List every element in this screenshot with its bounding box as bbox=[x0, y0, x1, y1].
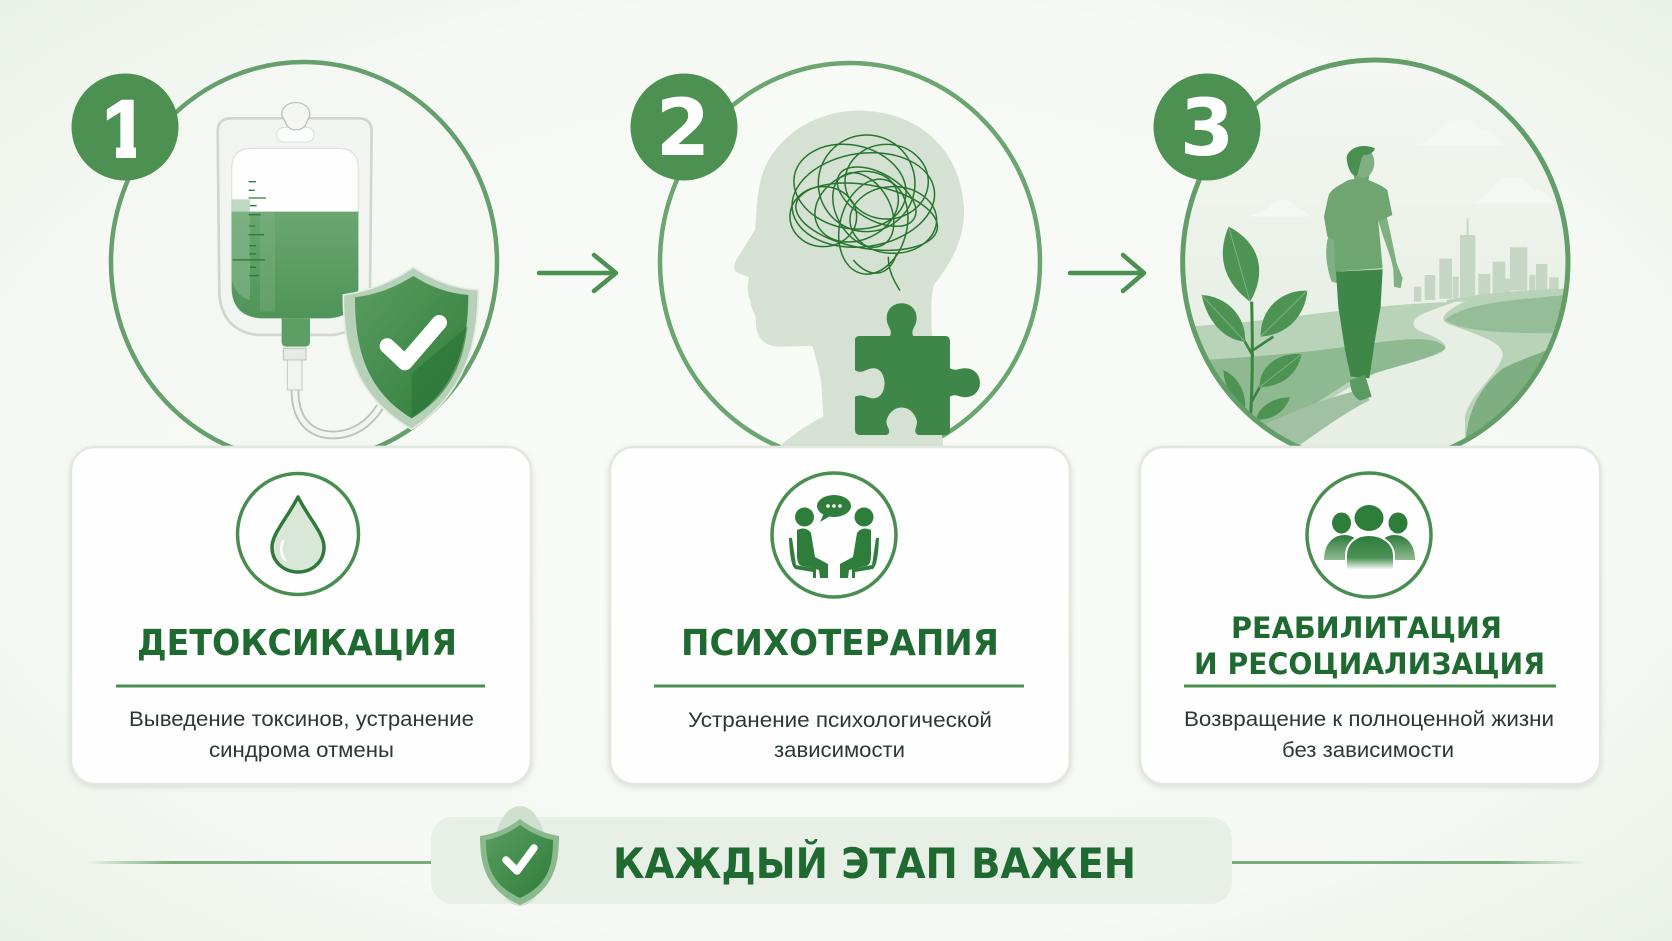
step 1: illustration bbox=[72, 62, 497, 462]
step 2: illustration bbox=[630, 63, 1040, 461]
step 3: illustration bbox=[1154, 57, 1573, 467]
description: Возвращение к полноценной жизни bbox=[1184, 708, 1554, 731]
description: без зависимости bbox=[1282, 739, 1454, 762]
ring 1 bbox=[111, 62, 497, 462]
badge 3: 3 bbox=[1180, 84, 1234, 174]
card 3: rehabilitation bbox=[1140, 447, 1600, 784]
icon: group of people bbox=[1307, 473, 1431, 597]
heading: ДЕТОКСИКАЦИЯ bbox=[137, 623, 457, 664]
arrow 1 bbox=[539, 255, 616, 291]
divider 2 bbox=[654, 684, 1024, 688]
walking scene bbox=[1180, 57, 1573, 467]
card 1: detox bbox=[71, 447, 531, 784]
footer banner bbox=[431, 806, 1232, 906]
icon: therapy conversation bbox=[772, 473, 896, 597]
badge 1: 1 bbox=[102, 84, 148, 175]
badge 1 bbox=[72, 74, 178, 180]
icon: puzzle piece bbox=[855, 303, 980, 435]
description bbox=[129, 708, 474, 762]
badge 2 bbox=[630, 74, 738, 180]
scribble bbox=[786, 121, 943, 291]
arrow 2 bbox=[1070, 255, 1144, 291]
heading: ПСИХОТЕРАПИЯ bbox=[681, 623, 999, 664]
ring 2 bbox=[660, 63, 1040, 461]
heading bbox=[1194, 611, 1545, 681]
badge 3 bbox=[1154, 74, 1260, 180]
plant bbox=[1202, 227, 1307, 420]
man walking bbox=[1324, 146, 1403, 401]
description: Выведение токсинов, устранение bbox=[129, 708, 474, 731]
hills bbox=[1195, 302, 1447, 403]
divider 3 bbox=[1184, 684, 1556, 688]
clouds bbox=[1247, 118, 1555, 217]
description: зависимости bbox=[774, 739, 905, 762]
skyline bbox=[1414, 218, 1559, 302]
icon: shield bbox=[343, 267, 478, 429]
badge 2: 2 bbox=[656, 84, 710, 174]
description: Устранение психологической bbox=[688, 709, 992, 732]
icon: small shield bbox=[480, 806, 559, 906]
divider 1 bbox=[116, 684, 485, 688]
icon: water drop bbox=[238, 474, 358, 594]
description: синдрома отмены bbox=[209, 739, 394, 762]
banner text: КАЖДЫЙ ЭТАП ВАЖЕН bbox=[613, 838, 1136, 888]
heading: И РЕСОЦИАЛИЗАЦИЯ bbox=[1194, 647, 1545, 681]
road shadow bbox=[1267, 390, 1370, 447]
heading: РЕАБИЛИТАЦИЯ bbox=[1231, 611, 1502, 645]
right meadow bbox=[1466, 350, 1546, 438]
description bbox=[688, 709, 992, 762]
winding road bbox=[1300, 302, 1503, 446]
description bbox=[1184, 708, 1554, 762]
icon: IV bag bbox=[218, 102, 478, 435]
card 2: psychotherapy bbox=[610, 447, 1070, 784]
footer line right bbox=[1232, 861, 1586, 864]
footer line left bbox=[85, 861, 431, 864]
ring 3 bbox=[1183, 60, 1568, 464]
head silhouette with tangled thoughts bbox=[734, 111, 980, 447]
